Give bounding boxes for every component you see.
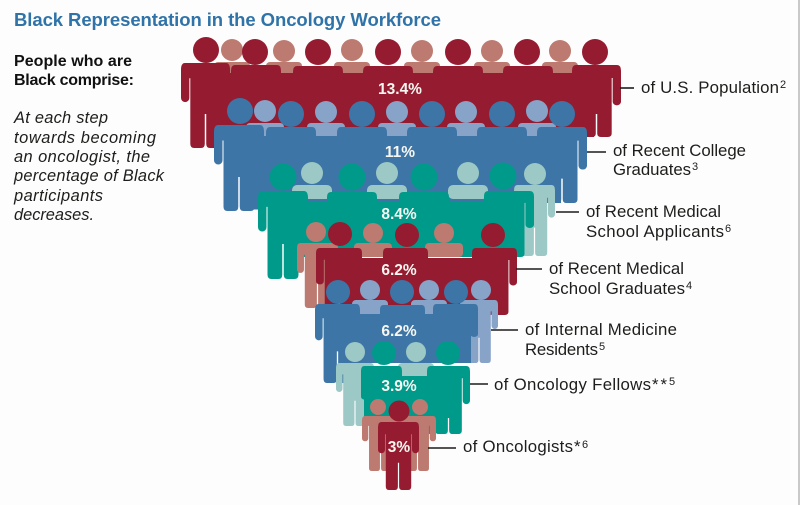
percentage values: 3.9%: [381, 378, 417, 395]
intro text: an oncologist, the: [14, 148, 150, 166]
percentage values: 6.2%: [381, 323, 417, 340]
label: recent medical school graduates: School Graduates: [549, 279, 685, 298]
label: recent medical school applicants: 6: [725, 223, 731, 235]
percentage values: [378, 81, 422, 456]
label: U.S. population: 2: [780, 79, 786, 91]
intro heading: [14, 53, 134, 89]
intro text: towards becoming: [14, 129, 156, 147]
label: recent medical school applicants: of Recent Medical: [586, 202, 721, 221]
title: Black Representation in the Oncology Workforce: [14, 9, 441, 30]
percentage values: 11%: [385, 144, 415, 161]
label: internal medicine residents: Residents: [525, 340, 598, 359]
intro text: At each step: [13, 109, 108, 127]
row 3: recent medical school applicants figures: [258, 162, 555, 279]
label: recent medical school applicants: School Applicants: [586, 222, 724, 241]
intro text: [13, 109, 165, 224]
intro heading: People who are: [14, 53, 132, 70]
label: oncology fellows: 5: [669, 376, 675, 388]
label: recent college graduates: Graduates: [613, 160, 691, 179]
label: internal medicine residents: [491, 320, 677, 359]
label: internal medicine residents: of Internal Medicine: [525, 320, 677, 339]
label: recent college graduates: of Recent College: [613, 141, 746, 160]
percentage values: 6.2%: [381, 262, 417, 279]
row 1: U.S. population figures: [181, 37, 621, 148]
percentage values: 3%: [388, 439, 410, 456]
label: recent college graduates: 3: [692, 161, 698, 173]
percentage values: 8.4%: [381, 206, 417, 223]
label: oncologists: of Oncologists: [463, 437, 573, 456]
label: recent college graduates: [587, 141, 746, 179]
label: oncologists: 6: [582, 439, 588, 451]
percentage values: 13.4%: [378, 81, 422, 98]
label: oncologists: *: [574, 437, 581, 456]
intro heading: Black comprise:: [14, 72, 134, 89]
label: U.S. population: of U.S. Population: [641, 78, 779, 97]
intro text: percentage of Black: [13, 167, 165, 185]
label: recent medical school graduates: of Recent Medical: [549, 259, 684, 278]
label: internal medicine residents: 5: [599, 341, 605, 353]
row 4: recent medical school graduates figures: [297, 222, 517, 315]
label: recent medical school graduates: [516, 259, 692, 298]
row 7: oncologists figures: [362, 399, 436, 490]
row 5: internal medicine residents figures: [315, 280, 498, 383]
intro text: decreases.: [14, 206, 94, 224]
label: oncologists: [428, 437, 588, 456]
label: oncology fellows: **: [652, 375, 667, 394]
label: recent medical school applicants: [556, 202, 731, 241]
row 6: oncology fellows figures: [336, 341, 470, 434]
label: recent medical school graduates: 4: [686, 280, 692, 292]
intro text: participants: [13, 187, 103, 205]
row 2: recent college graduates figures: [214, 98, 587, 211]
label: oncology fellows: of Oncology Fellows: [494, 375, 651, 394]
